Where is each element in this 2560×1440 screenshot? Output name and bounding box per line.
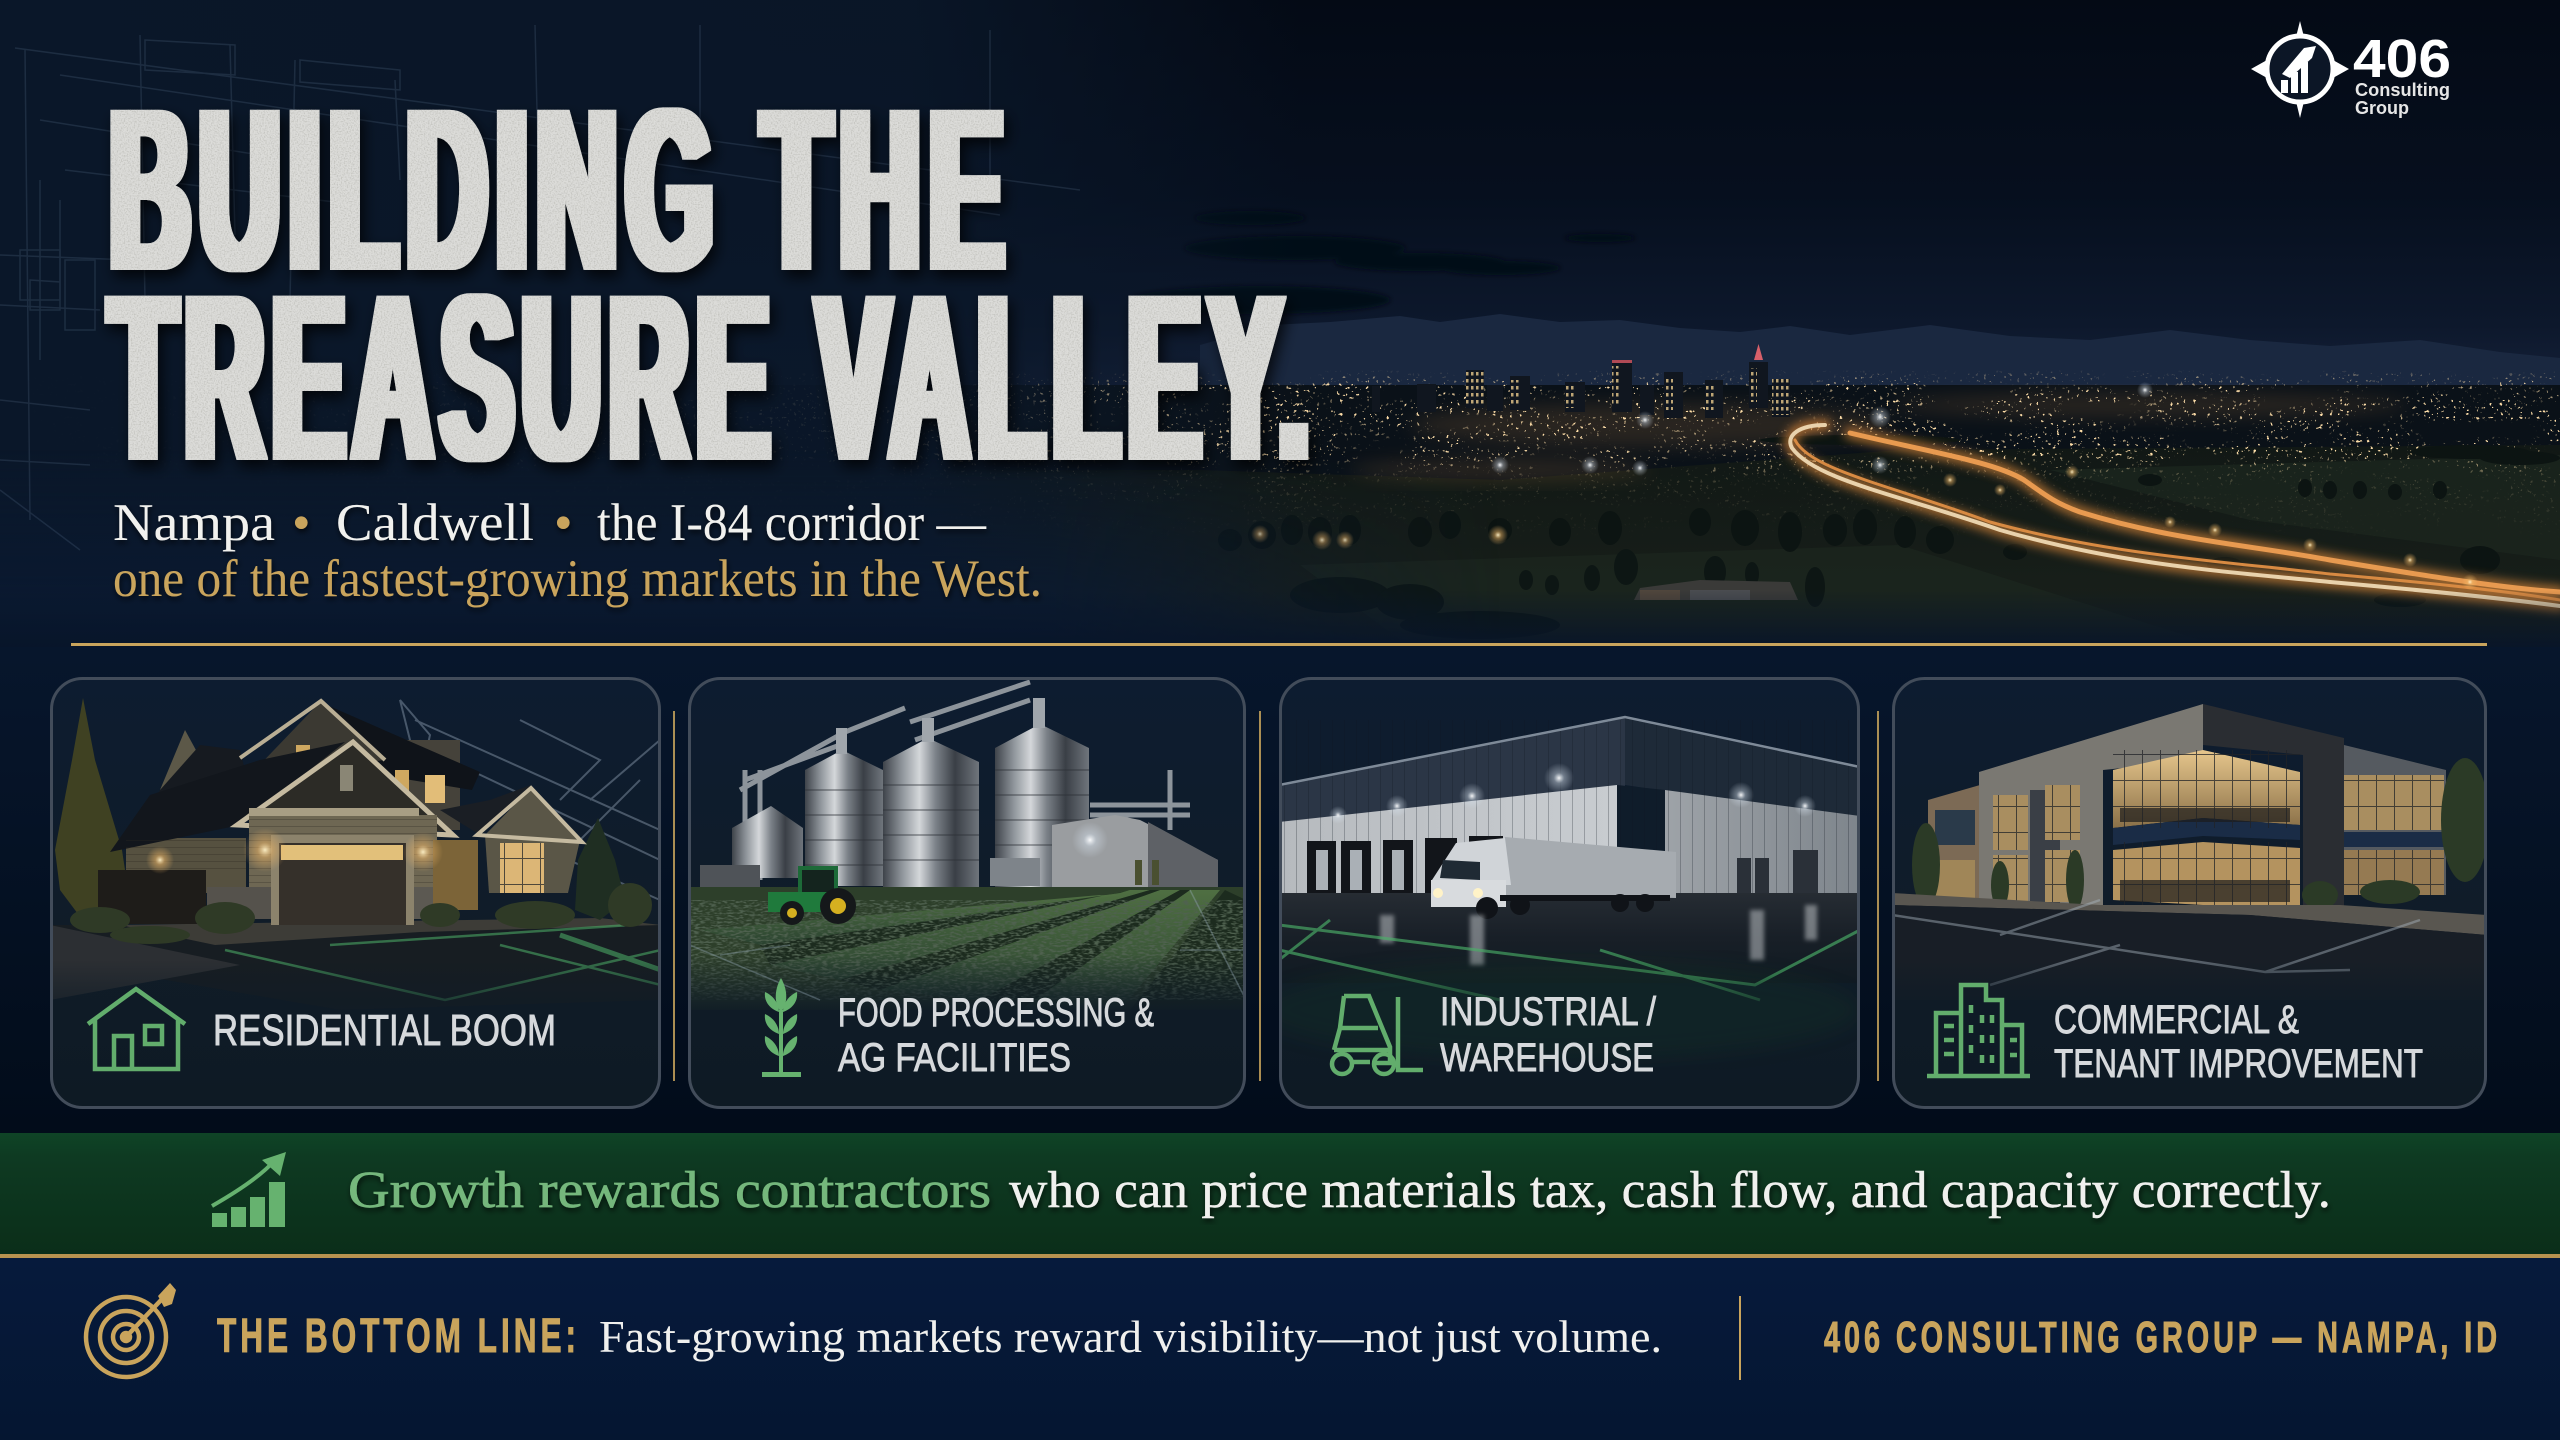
city ground	[0, 385, 2560, 485]
subtitle: •	[292, 494, 311, 552]
bottom line statement: Fast-growing markets reward visibility—not just volume.	[599, 1312, 1662, 1362]
tree right	[575, 818, 625, 920]
icon: house	[88, 989, 185, 1069]
highway light trails	[1790, 425, 2560, 606]
panel: residential boom	[50, 677, 661, 1109]
logo: 406 Consulting Group: Group	[2355, 98, 2409, 118]
title	[110, 61, 1318, 510]
subtitle: Caldwell	[336, 494, 534, 552]
label: food processing: AG FACILITIES	[838, 1036, 1071, 1080]
left wing	[1928, 785, 1980, 900]
windows	[1993, 785, 2080, 903]
truck	[1431, 837, 1676, 919]
lit panels	[1279, 785, 1617, 893]
label: food processing	[838, 991, 1154, 1080]
upper bodies	[309, 740, 460, 830]
main wall	[249, 815, 437, 890]
subtitle: •	[554, 494, 573, 552]
left navy fade	[0, 0, 1300, 650]
label: commercial	[2054, 998, 2423, 1086]
gold divider rule	[71, 643, 2487, 646]
pavement	[1892, 893, 2487, 935]
skyline towers	[1372, 362, 1790, 418]
label: industrial warehouse: INDUSTRIAL /	[1440, 990, 1657, 1034]
ground	[50, 925, 661, 1010]
icon: office buildings	[1927, 985, 2030, 1076]
plant building	[1052, 815, 1218, 887]
silo 2	[883, 762, 979, 888]
icon: growth chart	[212, 1152, 286, 1227]
bottom line footer	[0, 1258, 2560, 1440]
bottom line label: THE BOTTOM LINE:	[217, 1310, 580, 1363]
hero night scene background	[0, 0, 2560, 650]
reflections	[1380, 905, 1817, 965]
fields	[0, 445, 2560, 650]
callout text: Growth rewards contractors	[348, 1162, 991, 1219]
clouds	[1130, 211, 1635, 314]
right gable	[440, 785, 531, 835]
city glow	[1350, 393, 2410, 482]
mountains	[1200, 314, 2560, 400]
left wing	[126, 838, 246, 893]
blueprint linework	[0, 25, 1080, 550]
blueprint lines	[400, 700, 660, 900]
panel: commercial and tenant improvement	[1892, 677, 2489, 1109]
cards section background	[0, 647, 2560, 1133]
lamps	[244, 830, 285, 870]
treelines	[1218, 435, 2560, 574]
silo 1	[805, 770, 883, 886]
big glass corner	[2113, 750, 2300, 828]
logo: 406 Consulting Group: Consulting	[2355, 80, 2450, 100]
subtitle: the I-84 corridor —	[597, 494, 987, 552]
green message band	[0, 1133, 2560, 1254]
subtitle	[113, 494, 1042, 608]
blueprint green lines	[1279, 920, 1860, 1000]
logo: 406 Consulting Group: 406	[2353, 29, 2451, 89]
title: BUILDING THE	[110, 61, 1013, 318]
callout text	[348, 1162, 2331, 1219]
subtitle: one of the fastest-growing markets in the West.	[113, 550, 1042, 608]
city lights	[336, 370, 2560, 528]
label: industrial warehouse: WAREHOUSE	[1440, 1036, 1654, 1080]
icon: forklift	[1332, 996, 1423, 1074]
separator	[1259, 711, 1261, 1081]
tractor	[768, 868, 856, 925]
label: industrial warehouse	[1440, 990, 1657, 1080]
label: food processing: FOOD PROCESSING &	[838, 991, 1154, 1035]
wall lights	[1329, 763, 1816, 824]
upper walls	[1279, 717, 1625, 830]
desks silhouettes	[2120, 808, 2290, 902]
tree left	[55, 698, 125, 912]
icon: target	[86, 1283, 176, 1377]
wet ground	[1279, 893, 1860, 983]
dock doors	[1307, 836, 1503, 893]
small silo	[732, 828, 803, 878]
callout text: who can price materials tax, cash flow, and capacity correctly.	[1009, 1162, 2331, 1219]
main block	[1979, 704, 2203, 907]
gantry	[740, 682, 1190, 880]
panel: food processing and ag facilities	[688, 677, 1246, 1109]
street lamps	[1251, 465, 2478, 590]
main roof	[110, 742, 345, 852]
trees	[1912, 758, 2489, 910]
gold band divider	[0, 1254, 2560, 1258]
garage door	[271, 835, 414, 925]
label: residential boom: RESIDENTIAL BOOM	[213, 1006, 556, 1055]
subtitle: Nampa	[113, 494, 275, 552]
roofline	[1279, 717, 1860, 785]
main gable	[246, 742, 449, 832]
separator	[1877, 711, 1879, 1081]
field	[688, 887, 1246, 1010]
right wing	[2344, 745, 2446, 895]
silo 3	[995, 748, 1089, 888]
farmhouse	[1634, 580, 1798, 600]
icon: compass with bars	[2251, 21, 2349, 118]
shrubs	[70, 883, 652, 944]
label: commercial: TENANT IMPROVEMENT	[2054, 1042, 2423, 1086]
separator	[673, 711, 675, 1081]
label: commercial: COMMERCIAL &	[2054, 998, 2299, 1042]
logo: 406 Consulting Group	[2251, 21, 2451, 118]
icon: wheat	[762, 978, 801, 1077]
panel: industrial warehouse	[1260, 677, 1860, 1109]
